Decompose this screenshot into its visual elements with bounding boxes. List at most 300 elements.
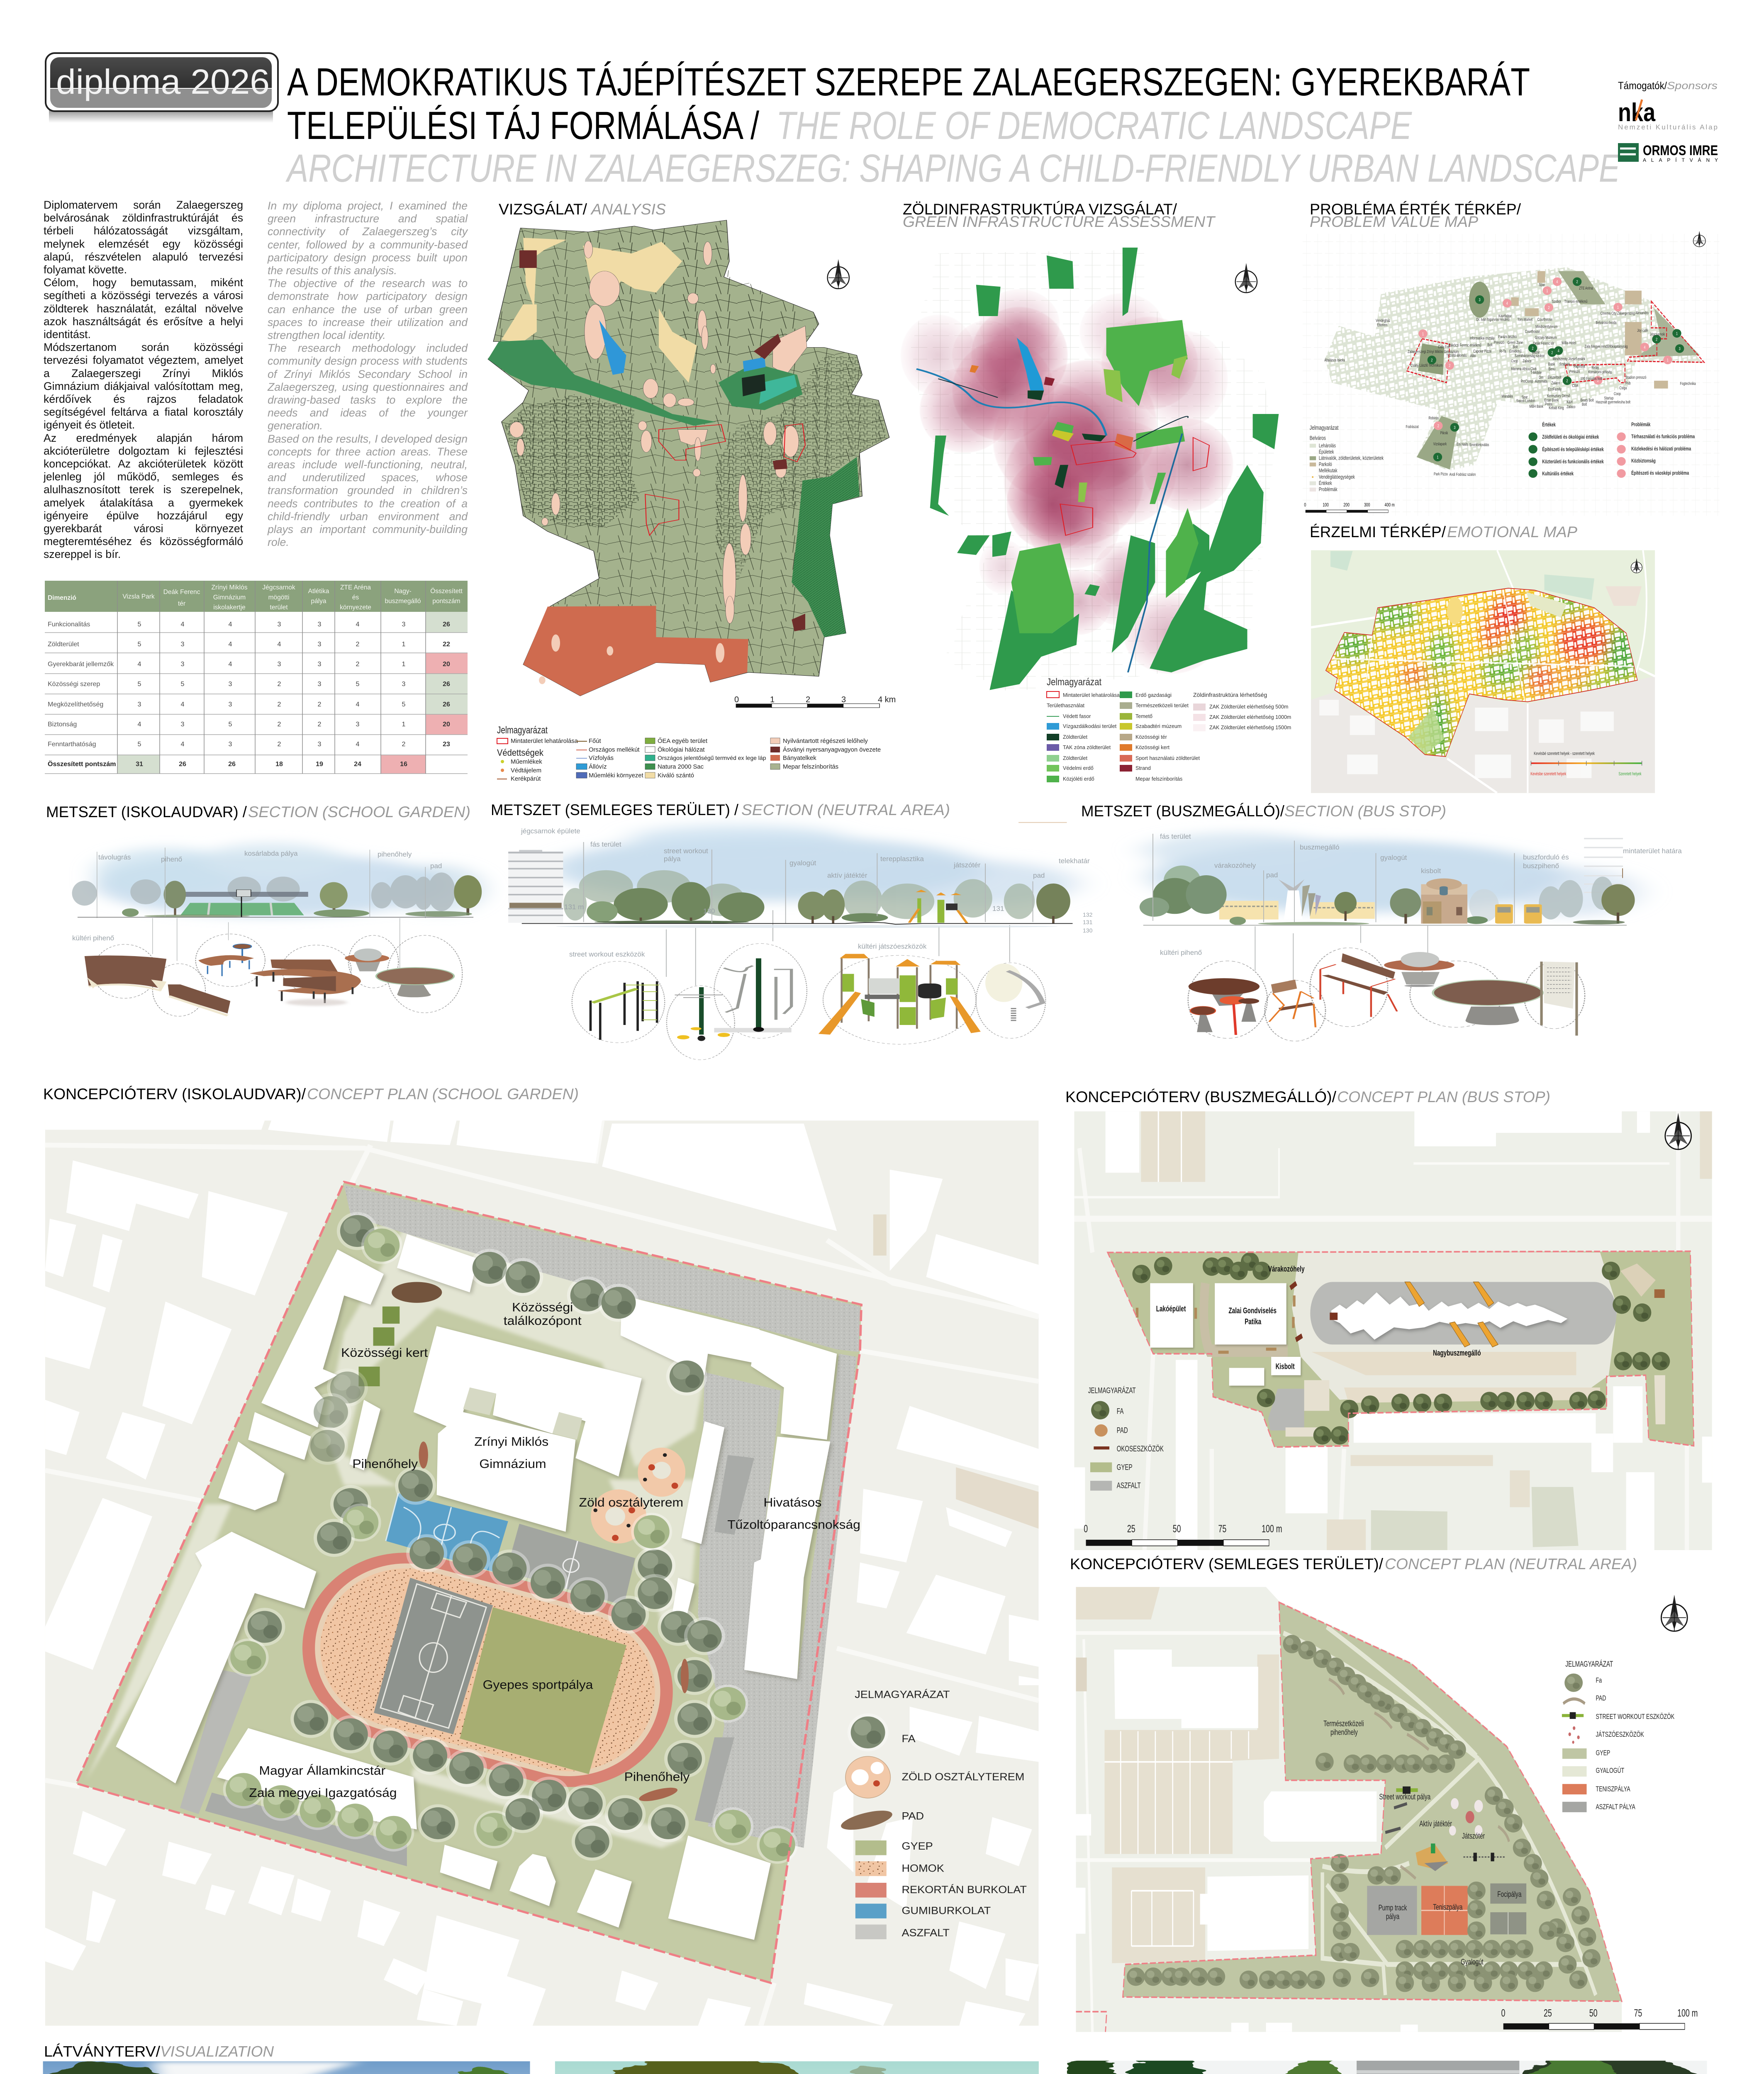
plan labels: Közösségi	[512, 1300, 573, 1314]
scale bar: neutral area: 0	[1501, 2007, 1505, 2019]
heading: problem value map: PROBLÉMA ÉRTÉK TÉRKÉP/	[1310, 201, 1521, 218]
logo: NKA: nka	[1618, 98, 1655, 127]
visualization: tree with circular bench	[548, 2059, 1039, 2074]
legend: neutral area: STREET WORKOUT ESZKÖZÖK	[1596, 1712, 1675, 1721]
legend: bus stop: ASZFALT	[1117, 1481, 1141, 1490]
place names: Bazár	[1532, 350, 1540, 355]
table: evaluation matrix: 20	[443, 721, 450, 728]
place names: EcoFamily	[1548, 387, 1562, 392]
labels: section bus stop: kültéri pihenő	[1160, 949, 1202, 957]
table: evaluation matrix: Fenntarthatóság	[48, 741, 96, 748]
place names: Ékszerbolt	[1548, 375, 1562, 380]
heading: emotional map	[1310, 523, 1577, 540]
text block: Hungarian abstract: alapú, részvételen alapuló tervezési	[44, 251, 243, 263]
dashed circles	[572, 944, 1045, 1060]
plan labels: pihenőhely	[1330, 1728, 1358, 1737]
legend: green infrastructure: TAK zóna zöldterület	[1063, 745, 1111, 750]
heading: concept plan school garden	[43, 1086, 579, 1103]
table: evaluation matrix: 2	[278, 701, 281, 708]
table: evaluation matrix: 22	[443, 641, 450, 648]
place names: Courthouse	[1537, 317, 1552, 322]
icon: north arrow	[828, 259, 849, 289]
value markers	[1428, 278, 1684, 461]
place names: Alexandro	[1635, 310, 1649, 315]
heading: problem value map	[1310, 201, 1521, 230]
heading: section neutral area: SECTION (NEUTRAL AREA)	[741, 801, 950, 818]
legend: base layers: Vendéglátóegységek	[1319, 474, 1355, 480]
sample area outlines	[645, 424, 805, 536]
table: evaluation matrix: 2	[318, 721, 322, 728]
legend: analysis: Ökológiai hálózat	[658, 746, 705, 753]
scale bar labels: analysis: 2	[806, 695, 810, 704]
scale bar: 200	[1343, 502, 1350, 508]
legend: school garden: GUMIBURKOLAT	[901, 1904, 991, 1916]
heading: section neutral area: METSZET (SEMLEGES TERÜLET) /	[491, 801, 739, 818]
legend: neutral area: JÁTSZÓESZKÖZÖK	[1596, 1730, 1644, 1739]
labels: section neutral area: 132	[1083, 911, 1093, 918]
place names: Dm	[1539, 375, 1543, 380]
text block: English abstract: areas include well-functioning, neutral,	[268, 458, 468, 471]
heat surface	[1326, 589, 1637, 756]
text block: English abstract: transformation grounded in children’s	[268, 484, 468, 497]
leader lines	[97, 847, 425, 968]
tower block	[508, 850, 563, 923]
place names: Csány László Technikum	[1411, 363, 1442, 368]
text block: English abstract: center, followed by a community-based	[268, 239, 468, 251]
place names: Bank	[1548, 362, 1555, 366]
place names: Mamma Africa Club	[1511, 366, 1537, 371]
heading: concept plan school garden: CONCEPT PLAN (SCHOOL GARDEN)	[307, 1086, 579, 1103]
table: evaluation matrix: 2	[318, 701, 322, 708]
base map	[1076, 1587, 1622, 2032]
heading: emotional map: ÉRZELMI TÉRKÉP/	[1310, 523, 1446, 540]
surrounding streets	[45, 1120, 1038, 2026]
table: evaluation matrix: 4	[138, 721, 141, 728]
asphalt surfaces	[344, 1185, 860, 1352]
place names: Zalaco	[1551, 380, 1560, 385]
marker numbers: 4	[1644, 345, 1645, 350]
table: evaluation matrix: Gimnázium	[213, 594, 246, 601]
diploma 2026 badge	[46, 53, 278, 123]
leader lines	[584, 842, 1033, 986]
place names: MBH Bank	[1529, 404, 1544, 409]
table: evaluation matrix: 26	[443, 621, 450, 628]
marker numbers: 1	[1676, 331, 1678, 336]
tree groups	[1140, 866, 1635, 925]
table: evaluation matrix: Zrínyi Miklós	[212, 584, 248, 591]
table: evaluation matrix: Deák Ferenc	[163, 589, 200, 596]
futsal court	[506, 1524, 635, 1605]
sponsors: Sponsors	[1667, 80, 1718, 92]
place names: ZTE Aréna	[1579, 286, 1593, 290]
legend: values and problems: Problémák	[1631, 422, 1651, 428]
marker numbers: 2	[1597, 378, 1599, 383]
table: evaluation matrix: 3	[229, 681, 232, 688]
legend: values and problems: Közlekedési és hálózati probléma	[1631, 446, 1691, 452]
text block: English abstract	[268, 200, 468, 549]
heat map accessibility	[900, 289, 1234, 674]
text block: Hungarian abstract: melynek elemzését egy közösségi	[44, 238, 243, 250]
place names: Zala Megyei rendőrfőkapitányság	[1585, 344, 1628, 349]
text block: English abstract: the results of this analysis.	[268, 264, 397, 277]
table: evaluation matrix: 1	[402, 661, 406, 668]
site boundary	[1108, 1251, 1694, 1447]
text block: English abstract: concepts for three action areas. These	[268, 445, 468, 458]
legend: green infrastructure: Szabadtéri múzeum	[1135, 723, 1182, 729]
table: evaluation matrix: és	[352, 594, 359, 601]
table: evaluation matrix: 4	[356, 621, 360, 628]
legend: analysis: Védtájelem	[511, 767, 541, 774]
legend: green infrastructure: ZAK Zöldterület elérhetőség 1000m	[1209, 714, 1291, 720]
place names: Ri-Ta	[1499, 349, 1506, 353]
young trees	[1277, 2056, 1633, 2074]
green classroom	[591, 1448, 685, 1543]
logo: Ormos Imre	[1618, 143, 1718, 163]
table: evaluation matrix: 4	[181, 741, 185, 748]
heading: green infrastructure: ZÖLDINFRASTRUKTÚRA VIZSGÁLAT/	[903, 201, 1177, 218]
table: evaluation matrix: Nagy-	[394, 588, 412, 595]
table: evaluation matrix: 4	[181, 701, 185, 708]
legend: base layers: Látnivalók, zöldterületek, közterületek	[1319, 455, 1384, 461]
leader lines	[1153, 834, 1514, 982]
text block: Hungarian abstract: Gimnázium diákjaival valósítottam meg,	[44, 380, 243, 392]
legend: analysis: Országos mellékút	[589, 747, 640, 753]
legend: base layers: Belváros	[1310, 435, 1326, 441]
place names: Stadion presszó	[1625, 375, 1647, 380]
legend: bus stop	[1088, 1386, 1164, 1491]
table: evaluation matrix: 18	[275, 761, 283, 768]
legend: school garden: ASZFALT	[901, 1927, 950, 1939]
visualization: bus stop garden	[1067, 2045, 1725, 2074]
background tower	[1584, 838, 1623, 893]
legend: school garden: REKORTÁN BURKOLAT	[901, 1884, 1027, 1896]
scale bar labels: analysis: 4 km	[878, 695, 896, 704]
heading: concept plan neutral area: KONCEPCIÓTERV (SEMLEGES TERÜLET)/	[1070, 1556, 1384, 1573]
place names: Kávélabor	[1498, 314, 1512, 318]
text block: English abstract: plays an important community-building	[268, 523, 468, 536]
legend: analysis: Főút	[589, 738, 601, 745]
planter	[345, 949, 389, 971]
table: evaluation matrix: Megközelíthetőség	[48, 701, 103, 708]
labels: section bus stop: mintaterület határa	[1623, 847, 1682, 855]
table: evaluation matrix: 3	[402, 681, 406, 688]
text block: Hungarian abstract: megteremtéséhez és közösségformáló	[44, 535, 243, 548]
legend: base layers: Parkoló	[1319, 462, 1332, 467]
legend: analysis: Védettségek	[497, 747, 544, 758]
legend: neutral area: PAD	[1596, 1694, 1606, 1702]
table: evaluation matrix: 3	[318, 621, 322, 628]
scale bar: bus stop: 75	[1218, 1523, 1226, 1535]
scale bar labels: analysis: 3	[841, 695, 846, 704]
heading: green infrastructure: GREEN INFRASTRUCTURE ASSESSMENT	[903, 213, 1216, 230]
marker numbers: 3	[1479, 297, 1481, 302]
title: TELEPÜLÉSI TÁJ FORMÁLÁSA /	[287, 104, 759, 148]
table: evaluation matrix: 3	[356, 721, 360, 728]
benches	[419, 1441, 689, 1804]
green patches dark	[930, 248, 1279, 690]
straight bench	[168, 984, 230, 1015]
sky wash	[552, 824, 1077, 907]
plan labels: Zöld osztályterem	[579, 1495, 683, 1509]
place names: Beaty Bolt	[1581, 398, 1594, 402]
text block: Hungarian abstract: amelyek átalakítása a gyermekek	[44, 497, 243, 509]
place names: Robiron	[1428, 416, 1439, 421]
place names: Cafe Frei	[1438, 344, 1450, 349]
text block: Hungarian abstract: igényeit és ötleteit.	[44, 419, 135, 431]
table: evaluation matrix: 4	[229, 661, 232, 668]
table: evaluation matrix: 3	[318, 661, 322, 668]
labels: section school garden: kültéri pihenő	[72, 934, 114, 942]
place names: Saxoo London	[1516, 398, 1535, 403]
marker numbers: 4	[1558, 348, 1559, 353]
legend: green infrastructure: Mepar felszínborítás	[1135, 776, 1182, 782]
text block: English abstract: demonstrate how participatory design	[268, 290, 468, 302]
place names: Parázs bisztró	[1498, 334, 1517, 339]
table: evaluation matrix: 3	[318, 681, 322, 688]
table: evaluation matrix: 1	[402, 641, 406, 648]
place names: Rákóczi Ferenc emlékmű	[1449, 343, 1481, 348]
heading: visualization	[44, 2043, 274, 2060]
labels: section neutral area: 130	[1083, 927, 1093, 934]
table: evaluation matrix: 2	[278, 741, 281, 748]
place names: Tűzoltó állomás	[1446, 353, 1467, 358]
scale bar: neutral area: 100 m	[1677, 2007, 1698, 2019]
legend: base layers: Épületek	[1319, 449, 1334, 455]
water and mines	[599, 320, 626, 375]
table: evaluation matrix: 4	[229, 621, 232, 628]
fitness station one	[675, 987, 730, 1041]
yellow buses	[1495, 904, 1542, 924]
labels: section neutral area	[521, 827, 1093, 958]
ecological corridors	[488, 340, 716, 426]
text block: Hungarian abstract: alulhasznosított terek is szerepelnek,	[44, 483, 243, 496]
place names: Göcseji Múzeum	[1535, 335, 1557, 340]
labels: section neutral area: street workout eszközök	[569, 950, 645, 958]
urban fabric	[1303, 234, 1719, 516]
table: evaluation matrix: mögötti	[268, 594, 289, 601]
text block: English abstract: spaces to increase their utilization and	[268, 316, 468, 329]
place names: Deák Ferenc tér	[1533, 341, 1554, 346]
table: evaluation matrix: 3	[181, 661, 185, 668]
plan labels: Aktív játéktér	[1419, 1819, 1452, 1828]
courtyard gaps	[463, 1388, 582, 1440]
place names: Vizslapark	[1433, 441, 1447, 446]
text block: Hungarian abstract: Célom, hogy bemutassam, miként	[44, 276, 243, 289]
legend: analysis: Vízfolyás	[589, 755, 614, 762]
plan labels: pálya	[1386, 1912, 1400, 1921]
logo: Ormos Imre: ALAPÍTVÁNY	[1643, 157, 1718, 163]
place names: Coop	[1614, 391, 1621, 396]
map: problem value map	[1303, 231, 1719, 516]
labels: section neutral area: 131 m	[564, 903, 584, 911]
table: evaluation matrix: 2	[402, 741, 406, 748]
table: evaluation matrix: Összesített	[430, 587, 463, 595]
text block: English abstract: community design process with students	[268, 355, 468, 367]
place names: Piknik	[1440, 431, 1448, 435]
place names: Erste Bank	[1545, 398, 1559, 402]
table: evaluation matrix: 26	[443, 681, 450, 688]
legend: green infrastructure: ZAK Zöldterület elérhetőség 500m	[1209, 704, 1288, 710]
legend: base layers: Lehárolás	[1319, 443, 1336, 449]
paths	[1283, 1627, 1596, 1995]
surrounding blocks	[1076, 1587, 1279, 1963]
background trees	[72, 872, 456, 911]
place names: Green Zone	[1507, 340, 1523, 345]
table: evaluation matrix: Funkcionalitás	[48, 621, 90, 628]
scale bar: neutral area: 75	[1634, 2007, 1642, 2019]
scale bar: neutral area	[1501, 2007, 1698, 2030]
labels: section bus stop: kisbolt	[1421, 867, 1441, 875]
place names: Relay	[1591, 365, 1599, 370]
dark right foliage	[1508, 2048, 1725, 2074]
heading: concept plan neutral area: CONCEPT PLAN (NEUTRAL AREA)	[1385, 1556, 1637, 1573]
ground line	[1143, 924, 1627, 927]
dashed circles	[93, 934, 462, 1016]
marker numbers: 2	[1576, 280, 1578, 284]
text block: English abstract: green infrastructure and spatial	[268, 212, 468, 225]
text block: English abstract: participatory design process built upon	[268, 251, 468, 264]
place names: Dr. Iván fogorvosi rendelő	[1476, 317, 1510, 322]
place names: Cinema City Zalaegerszeg	[1601, 311, 1635, 316]
table: evaluation matrix: Összesített pontszám	[48, 760, 116, 768]
title	[285, 60, 1620, 190]
table: evaluation matrix: 3	[229, 701, 232, 708]
legend: green infrastructure: Strand	[1135, 765, 1151, 771]
plan labels: Gimnázium	[479, 1457, 546, 1471]
legend: analysis: Országos jelentőségű termvéd ex lege láp	[658, 755, 766, 761]
clouds	[153, 2062, 467, 2074]
priority arable land	[502, 238, 697, 383]
play tower	[819, 954, 981, 1035]
logo: NKA: Nemzeti Kulturális Alap	[1618, 123, 1718, 131]
heading: green infrastructure	[903, 201, 1216, 230]
table: evaluation matrix: 5	[402, 701, 406, 708]
marker numbers: 2	[1551, 350, 1553, 355]
legend: school garden: HOMOK	[901, 1862, 944, 1874]
place names: Szobor	[1552, 299, 1561, 304]
tower block	[1357, 2061, 1519, 2074]
labels: section bus stop	[1160, 833, 1682, 957]
legend: analysis: Műemléki környezet	[589, 772, 643, 779]
text block: English abstract: generation.	[268, 419, 323, 432]
place names: Zalaco	[1567, 404, 1575, 409]
heading: analysis: VIZSGÁLAT/	[499, 201, 587, 218]
scale bar	[1304, 502, 1395, 513]
legend: analysis: Kerékpárút	[511, 776, 541, 782]
heading: analysis	[499, 201, 666, 218]
labels: section neutral area: 131	[992, 905, 1004, 913]
legend: school garden: PAD	[901, 1810, 924, 1822]
legend: neutral area: TENISZPÁLYA	[1596, 1785, 1630, 1793]
plan labels: Hivatásos	[763, 1495, 821, 1509]
place names: Csiga	[1619, 385, 1627, 390]
legend: base layers: Problémák	[1319, 487, 1338, 492]
legend: school garden: ZÖLD OSZTÁLYTEREM	[901, 1771, 1024, 1783]
place names: Papírbolt	[1574, 364, 1585, 369]
table: evaluation matrix: 2	[356, 641, 360, 648]
place names: Benu	[1549, 367, 1555, 372]
buildings on site	[116, 1234, 837, 1940]
legend: green infrastructure: Védelmi erdő	[1063, 765, 1094, 771]
text block: English abstract: can enhance the use of urban green	[268, 303, 468, 316]
text block: English abstract: The research methodology included	[268, 342, 468, 354]
round bench with table	[198, 944, 254, 976]
legend: green infrastructure: Közösségi kert	[1135, 745, 1170, 750]
legend: bus stop: GYEP	[1117, 1463, 1133, 1472]
place names: Általános Iskola	[1324, 358, 1345, 363]
place names	[1324, 282, 1696, 477]
concept plan: school garden	[45, 1120, 1038, 2026]
legend: green infrastructure: Zöldterület	[1063, 755, 1088, 761]
heading: section school garden: METSZET (ISKOLAUDVAR) /	[46, 803, 247, 820]
table: evaluation matrix: Biztonság	[48, 721, 77, 728]
place names: Kebab King	[1549, 405, 1564, 410]
marker numbers: 2	[1449, 363, 1450, 368]
table: evaluation matrix: 4	[356, 701, 360, 708]
street workout and playground	[1385, 1787, 1505, 1871]
legend: school garden: FA	[901, 1733, 916, 1745]
yellow buses	[1405, 1282, 1498, 1347]
green patches light	[1011, 320, 1199, 633]
marker numbers: 2	[1566, 378, 1568, 383]
table: evaluation matrix: 3	[138, 701, 141, 708]
emotion legend: Kevésbe szeretett helyek	[1530, 771, 1566, 777]
icon: north arrow	[1631, 558, 1642, 573]
ground line	[78, 916, 473, 918]
scale bar: bus stop	[1084, 1523, 1282, 1546]
labels: section bus stop: fás terület	[1160, 833, 1191, 840]
plan labels: Gyepes sportpálya	[483, 1678, 593, 1692]
background trees	[554, 2066, 1037, 2074]
table: evaluation matrix: 3	[278, 621, 281, 628]
legend: analysis: Bányatelkek	[783, 755, 816, 762]
park benches	[1329, 1679, 1509, 1879]
map: emotional map	[1311, 550, 1655, 793]
table: evaluation matrix: 3	[318, 741, 322, 748]
legend: bus stop: PAD	[1117, 1426, 1128, 1435]
place names: Emlékmű	[1509, 349, 1522, 353]
labels: section neutral area: telekhatár	[1059, 857, 1090, 865]
place names: Pub	[1625, 381, 1631, 386]
section: school garden	[72, 842, 486, 1016]
site lawn	[76, 1182, 861, 1983]
place names: Automata	[1535, 379, 1547, 384]
table: evaluation matrix: Jégcsarnok	[262, 584, 295, 591]
labels: section neutral area: aktív játéktér	[827, 871, 867, 879]
legend: neutral area: JELMAGYARÁZAT	[1565, 1660, 1613, 1669]
marker numbers: 4	[1506, 301, 1508, 306]
labels: section neutral area: kültéri játszóeszközök	[858, 942, 927, 950]
marker numbers: 2	[1532, 346, 1533, 351]
labels: section bus stop: buszforduló és	[1523, 853, 1569, 861]
legend: green infrastructure: ZAK Zöldterület elérhetőség 1500m	[1209, 725, 1291, 730]
legend: analysis: Natura 2000 Sac	[658, 764, 704, 770]
sport courts	[1367, 1884, 1526, 1935]
legend: green infrastructure: Közösségi tér	[1135, 734, 1167, 740]
table: evaluation matrix: 2	[278, 681, 281, 688]
place names: Capone Pizza	[1473, 349, 1491, 353]
table: evaluation matrix: 1	[402, 721, 406, 728]
place names: Keresztury Dezső	[1547, 393, 1570, 398]
concept plan: neutral area	[1076, 1587, 1698, 2032]
trees	[1132, 1252, 1670, 1445]
ground line	[522, 923, 1072, 924]
plan labels: Pump track	[1379, 1903, 1407, 1912]
legend: values and problems: Közterületi és funkcionális értékek	[1542, 459, 1604, 465]
table: evaluation matrix: Vizsla Park	[122, 593, 155, 600]
title: THE ROLE OF DEMOCRATIC LANDSCAPE	[776, 104, 1412, 148]
place names: Zalaegerszegi Zrínyi Miklós Gimnázium	[1408, 349, 1459, 354]
